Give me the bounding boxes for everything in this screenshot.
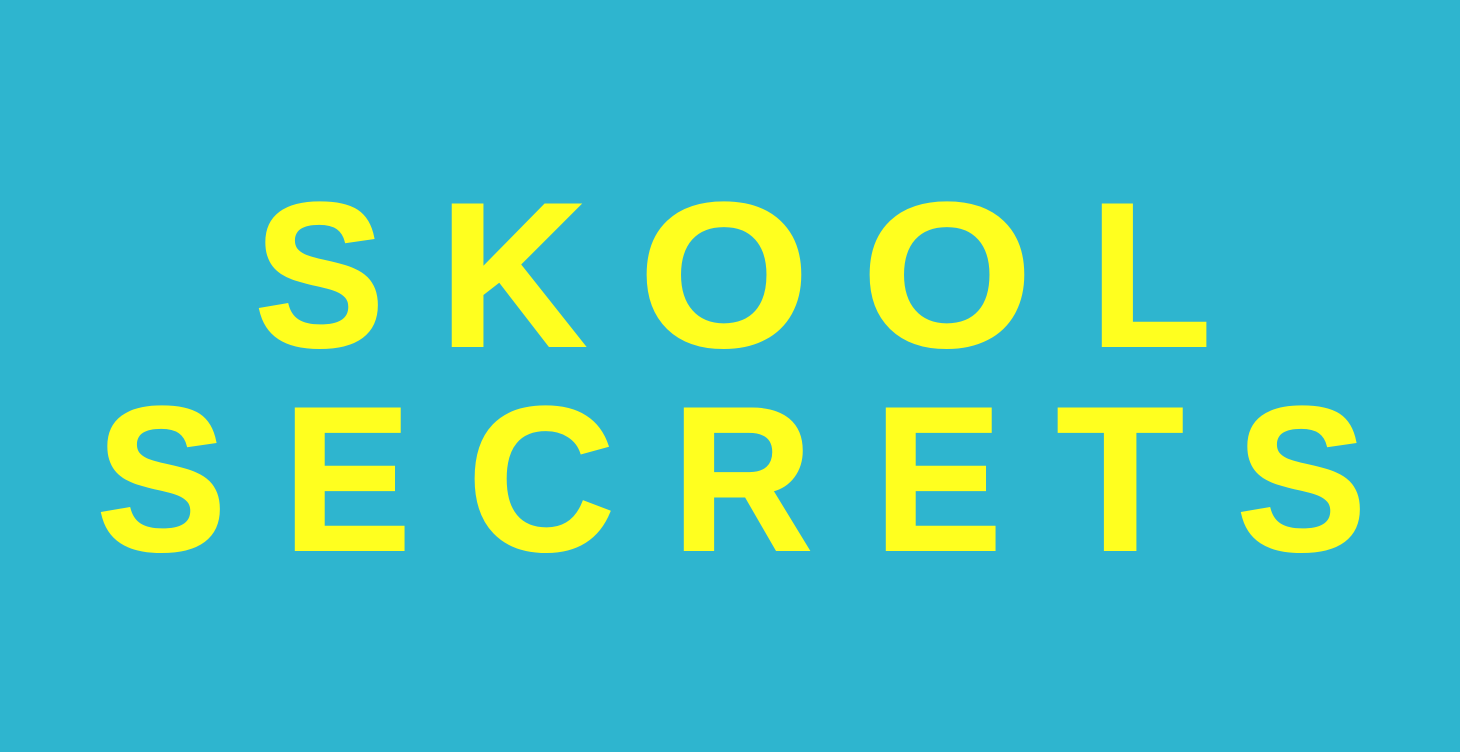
heading line 2: SECRETS: S: [1237, 365, 1366, 594]
heading line 2: SECRETS: R: [672, 365, 812, 594]
heading line 1: SKOOL: K: [439, 161, 586, 390]
heading line 2: SECRETS: C: [468, 365, 615, 594]
heading line 1: SKOOL: S: [255, 161, 384, 390]
heading line 2: SECRETS: T: [1057, 364, 1184, 593]
heading line 2: SECRETS: E: [874, 365, 1002, 594]
heading line 2: SECRETS: [97, 364, 1366, 594]
heading line 1: SKOOL: O: [862, 160, 1032, 389]
heading line 1: SKOOL: L: [1090, 160, 1211, 389]
heading line 2: SECRETS: E: [283, 365, 411, 594]
heading line 1: SKOOL: O: [639, 160, 809, 389]
heading line 2: SECRETS: S: [97, 365, 226, 594]
heading line 1: SKOOL: [255, 160, 1211, 390]
